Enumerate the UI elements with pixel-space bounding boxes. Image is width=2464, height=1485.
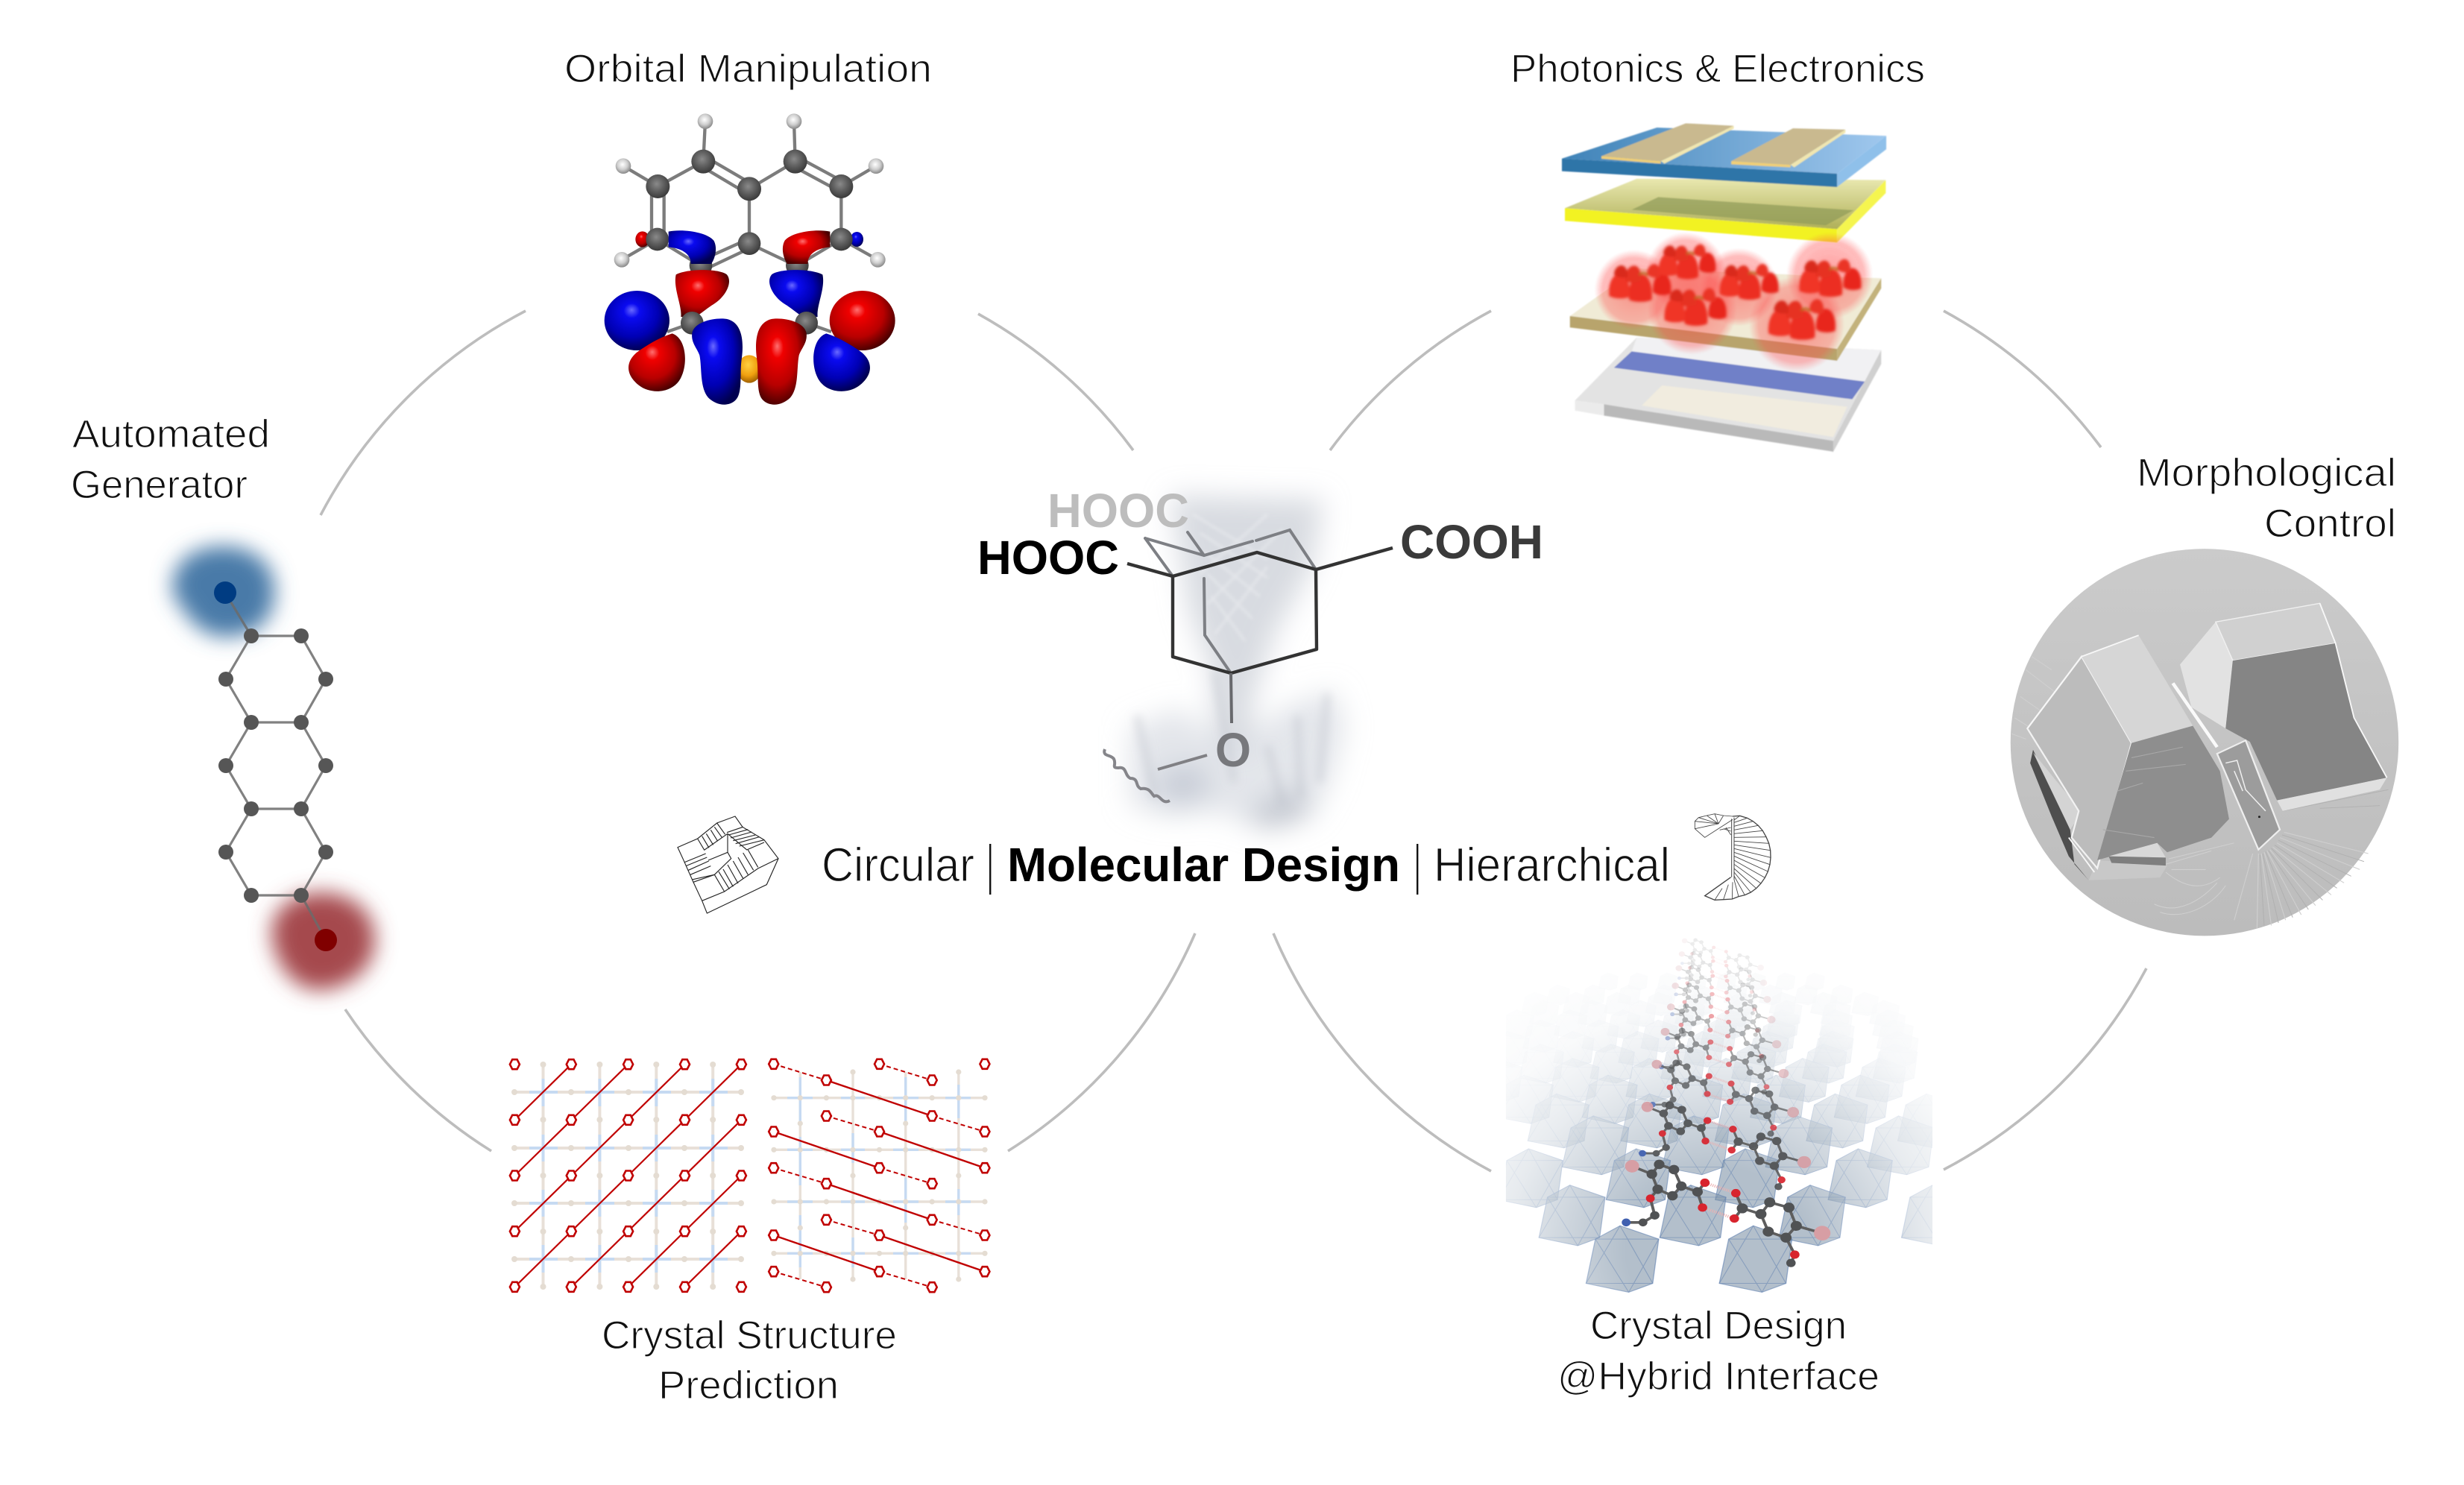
heading: Crystal Structure Prediction: [602, 1314, 897, 1407]
oxygen and tail: [1104, 673, 1251, 801]
hexagon chain bonds: [225, 593, 326, 940]
panel: crystal structure prediction left lattice: [510, 1059, 746, 1292]
grid nodes: [771, 1069, 988, 1282]
small triangle crystal: [2108, 843, 2166, 866]
center: translucent fog behind molecule: [1129, 496, 1346, 829]
carbon atoms: [646, 150, 853, 277]
right crystal left face: [2180, 622, 2233, 728]
sem disc: [2011, 549, 2398, 936]
center: fog hatch texture: [1193, 514, 1282, 641]
lower carbon bonds: [667, 323, 831, 332]
step lines: [2103, 747, 2186, 838]
vertical perspective fade: [1499, 904, 1935, 1296]
adamantane front bonds: [1127, 548, 1393, 673]
icon: stair (circular): [678, 816, 778, 913]
heading: Morphological Control: [2137, 451, 2396, 546]
label: HOOC bold: HOOC: [977, 531, 1119, 584]
upper lobes: [669, 230, 716, 264]
solid red bonds: [774, 1080, 985, 1272]
red hexagon markers: [510, 1059, 746, 1292]
right crystal top face: [2216, 603, 2336, 660]
heading: Automated Generator: Automated: [72, 412, 270, 456]
blue top layer: [1562, 127, 1886, 187]
yellow layer: [1565, 179, 1885, 242]
crystal highlights: [2027, 603, 2387, 872]
side mask left: [1463, 904, 1506, 1296]
right crystal ledge: [2277, 778, 2387, 811]
heading: Photonics & Electronics: Photonics & Electronics: [1510, 47, 1925, 91]
heading: Morphological Control: Control: [2264, 502, 2396, 546]
ripple shadows: [2260, 789, 2388, 925]
connecting arcs: right circle: [1273, 311, 2146, 1171]
ripple lines: [2011, 657, 2369, 928]
heading: Orbital Manipulation: Orbital Manipulation: [564, 47, 932, 91]
big lobes: [605, 291, 669, 350]
heading: Crystal Structure Prediction: Prediction: [658, 1363, 839, 1407]
blue grid highlights: [787, 1077, 971, 1267]
chain atoms: [218, 628, 333, 903]
left crystal left face: [2027, 657, 2131, 868]
heading: Morphological Control: Morphological: [2137, 451, 2396, 495]
heading: Automated Generator: [71, 412, 270, 507]
left crystal dark face: [2097, 726, 2229, 860]
label: COOH: COOH: [1400, 515, 1543, 569]
quantum dot clusters: [1609, 245, 1862, 340]
heading: Crystal Design @Hybrid Interface: @Hybrid Interface: [1557, 1355, 1879, 1399]
panel: automated generator molecule: [172, 546, 375, 990]
heading: Automated Generator: Generator: [71, 463, 248, 507]
right crystal dark face: [2225, 643, 2387, 801]
side mask right: [1932, 904, 1976, 1296]
label: HOOC faded: HOOC: [1047, 484, 1189, 537]
blue terminal atom: [214, 581, 236, 604]
panel: orbital manipulation model: [605, 113, 895, 405]
bonds: [622, 122, 877, 270]
beige grid: [774, 1072, 985, 1279]
panel: morphology SEM crystals: [2011, 549, 2398, 936]
bottom substrate: [1575, 338, 1881, 452]
icon: spiral staircase (hierarchical): [1695, 814, 1771, 900]
red diagonals: [514, 1065, 741, 1287]
glow halos: [1595, 232, 1873, 372]
dashed red bonds: [774, 1064, 985, 1287]
small center crystal: [2217, 740, 2280, 850]
red glow: [271, 892, 375, 990]
center: fog wisps: [1137, 671, 1327, 805]
blue glow: [172, 546, 274, 637]
panel: crystal structure prediction right lattice: [769, 1059, 989, 1292]
small lobes: [635, 231, 649, 248]
gap highlight: [2172, 683, 2217, 747]
central title: Circular: [822, 838, 974, 892]
central title: [822, 838, 1670, 895]
heading: Crystal Structure Prediction: Crystal Structure: [602, 1314, 897, 1358]
red terminal atom: [315, 929, 337, 951]
blue grid highlights: [529, 1079, 728, 1273]
octahedra rows: [1472, 973, 1967, 1292]
red hexagon markers: [769, 1059, 989, 1292]
central title: Hierarchical: [1434, 838, 1670, 892]
hydrogen atoms: [614, 113, 886, 268]
heading: Crystal Design @Hybrid Interface: [1557, 1304, 1879, 1399]
left crystal top face: [2082, 635, 2193, 743]
panel: crystal design at hybrid interface: [1463, 904, 1976, 1296]
left crystal shadow: [2030, 750, 2089, 880]
connecting arcs: left circle: [321, 311, 1195, 1151]
central title: Molecular Design: [1007, 838, 1400, 892]
grid nodes: [511, 1062, 744, 1290]
brown active layer: [1570, 268, 1881, 361]
heading: Crystal Design @Hybrid Interface: Crystal Design: [1590, 1304, 1847, 1348]
gold atom: [737, 355, 761, 383]
adamantane back bonds: [1145, 530, 1316, 673]
lobes mid: [675, 270, 729, 318]
oxygen and tail: O: [1215, 723, 1251, 777]
left crystal ledge: [2033, 752, 2079, 830]
panel: photonics device stack: [1562, 123, 1886, 452]
gold electrodes: [1601, 123, 1845, 168]
beige grid: [514, 1065, 741, 1287]
molecule stack: [1622, 939, 1830, 1267]
bottom ledge: [2089, 860, 2167, 880]
lower carbon atoms: [681, 312, 704, 335]
